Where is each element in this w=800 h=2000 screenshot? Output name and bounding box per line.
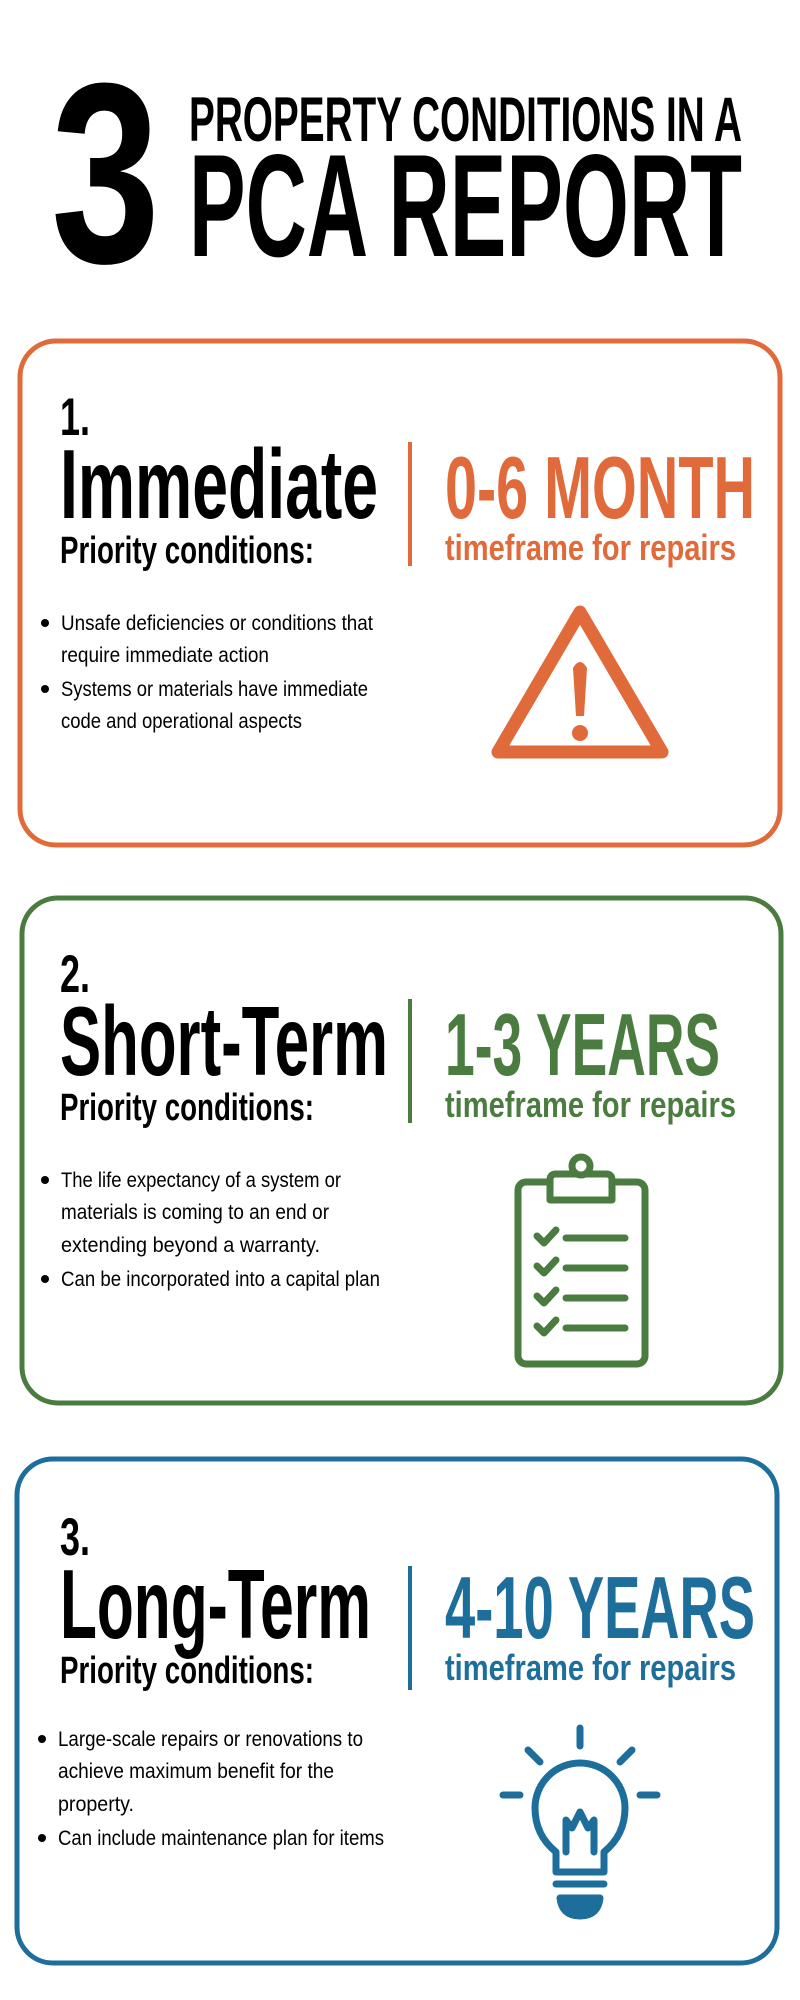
bullet list: achieve maximum benefit for the [58, 1760, 334, 1783]
timeframe: 4-10 years: timeframe for repairs [445, 1647, 736, 1688]
bullet list: code and operational aspects [61, 710, 302, 733]
bullet list: property. [58, 1793, 134, 1816]
heading: 1. Immediate: Priority conditions: [60, 530, 314, 572]
icon: light bulb [503, 1728, 657, 1916]
icon: clipboard checklist [518, 1157, 645, 1364]
bullet list: Unsafe deficiencies or conditions that [61, 612, 373, 635]
heading: 2. Short-Term: 2. [60, 945, 90, 1004]
title: 3 [51, 30, 160, 317]
title [51, 30, 742, 317]
bullet list: extending beyond a warranty. [61, 1234, 320, 1257]
timeframe: 1-3 years: timeframe for repairs [445, 1084, 736, 1125]
heading: 2. Short-Term: Short-Term [60, 986, 388, 1096]
bullet list: materials is coming to an end or [61, 1201, 329, 1224]
heading: 2. Short-Term: Priority conditions: [60, 1087, 314, 1129]
heading: 1. Immediate: 1. [60, 388, 90, 447]
bullet list: The life expectancy of a system or [61, 1169, 341, 1192]
heading: 3. Long-Term: Long-Term [60, 1549, 371, 1659]
timeframe: 4-10 years [445, 1558, 755, 1688]
bullet list: Systems or materials have immediate [61, 678, 368, 701]
timeframe: 1-3 years [445, 995, 736, 1125]
bullet list: Can include maintenance plan for items [58, 1827, 384, 1850]
heading: 3. Long-Term [60, 1508, 371, 1692]
heading: 3. Long-Term: 3. [60, 1508, 90, 1567]
panel: immediate [20, 341, 780, 845]
timeframe: 0-6 month [445, 438, 755, 568]
heading: 1. Immediate [60, 388, 378, 572]
heading: 1. Immediate: Immediate [60, 429, 378, 539]
bullet list [38, 1728, 384, 1850]
icon: warning triangle [498, 612, 662, 752]
bullet list: Can be incorporated into a capital plan [61, 1268, 380, 1291]
panel: short-term [22, 898, 781, 1403]
panel: long-term [17, 1459, 777, 1963]
bullet list [41, 1169, 380, 1291]
bullet list [41, 612, 373, 733]
timeframe: 0-6 month: timeframe for repairs [445, 527, 736, 568]
heading: 3. Long-Term: Priority conditions: [60, 1650, 314, 1692]
heading: 2. Short-Term [60, 945, 388, 1129]
bullet list: Large-scale repairs or renovations to [58, 1728, 363, 1751]
bullet list: require immediate action [61, 644, 269, 667]
